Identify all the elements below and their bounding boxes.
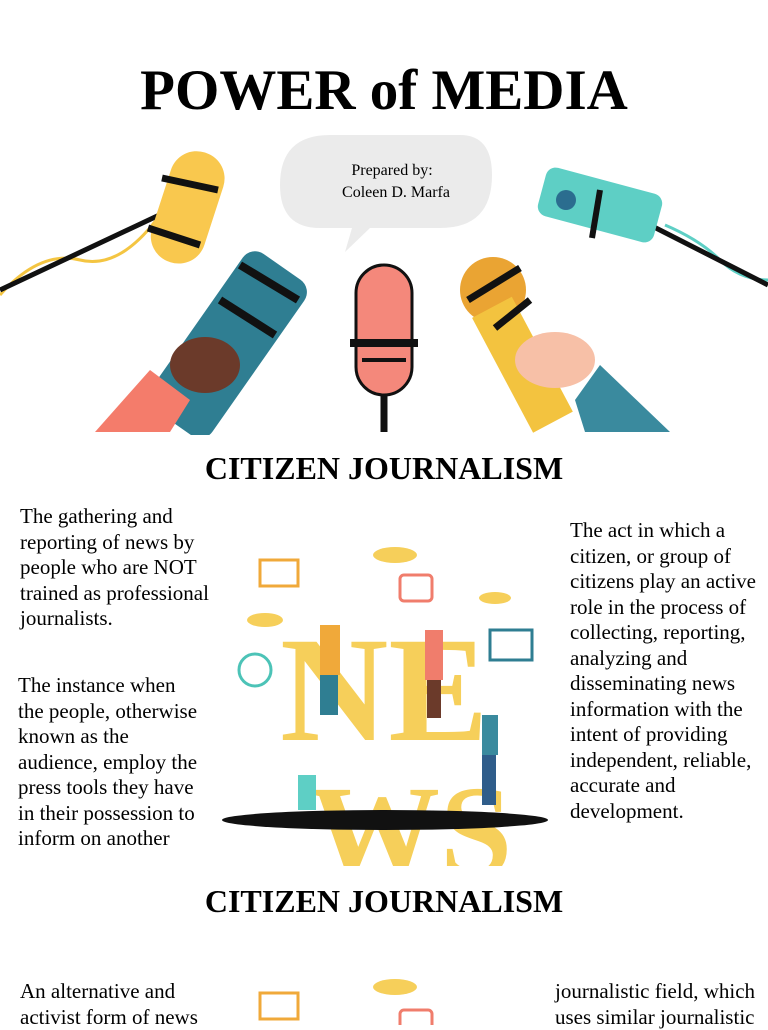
- text: right: citizens play an active: [570, 569, 756, 593]
- text: right: development.: [570, 798, 684, 822]
- text: right: The act in which a: [570, 518, 725, 542]
- text: left bottom: [18, 673, 197, 850]
- text: bottom right: [554, 979, 755, 1028]
- heading 1: CITIZEN JOURNALISM: [205, 450, 563, 486]
- text: left top: people who are NOT: [20, 555, 197, 579]
- news illustration: [222, 547, 548, 866]
- news illustration: NE: [280, 607, 488, 773]
- text: right: role in the process of: [570, 594, 746, 618]
- text: left bottom: known as the: [18, 724, 129, 748]
- text: left top: journalists.: [20, 606, 113, 630]
- speech bubble: Prepared by:: [351, 162, 433, 179]
- text: right: independent, reliable,: [570, 748, 751, 772]
- microphones illustration: [0, 135, 768, 435]
- text: left bottom: the people, otherwise: [18, 698, 197, 722]
- icon: pink stand mic: [350, 265, 418, 432]
- text: bottom left: An alternative and: [20, 979, 175, 1003]
- text: bottom right: uses similar journalistic: [555, 1004, 754, 1028]
- text: left bottom: audience, employ the: [18, 750, 197, 774]
- text: left bottom: in their possession to: [18, 800, 195, 824]
- text: right: citizen, or group of: [570, 544, 731, 568]
- text: right: intent of providing: [570, 722, 727, 746]
- text: right: [570, 518, 756, 822]
- text: right: accurate and: [570, 773, 676, 797]
- text: left bottom: The instance when: [18, 673, 175, 697]
- text: left top: trained as professional: [20, 580, 209, 604]
- text: right: collecting, reporting,: [570, 620, 746, 644]
- text: right: information with the: [570, 696, 743, 720]
- text: left bottom: inform on another: [18, 826, 170, 850]
- text: left top: [19, 504, 209, 630]
- title: POWER of MEDIA: [140, 59, 628, 122]
- text: right: analyzing and: [570, 646, 687, 670]
- text: left top: The gathering and: [20, 504, 173, 528]
- text: bottom right: journalistic field, which: [555, 979, 755, 1003]
- text: bottom left: [20, 979, 198, 1028]
- text: left top: reporting of news by: [20, 530, 194, 554]
- text: left bottom: press tools they have: [18, 775, 194, 799]
- heading 2: CITIZEN JOURNALISM: [205, 883, 563, 919]
- speech bubble: Coleen D. Marfa: [342, 184, 450, 201]
- speech bubble: [280, 135, 492, 252]
- icon: teal mic right: [536, 165, 768, 285]
- partial illustration bottom: [258, 979, 434, 1025]
- text: bottom left: activist form of news: [20, 1004, 198, 1028]
- icon: yellow boom mic: [0, 144, 232, 295]
- text: right: disseminating news: [570, 671, 735, 695]
- icon: orange handheld mic with hand: [460, 257, 670, 433]
- icon: blue handheld mic with hand: [95, 245, 313, 444]
